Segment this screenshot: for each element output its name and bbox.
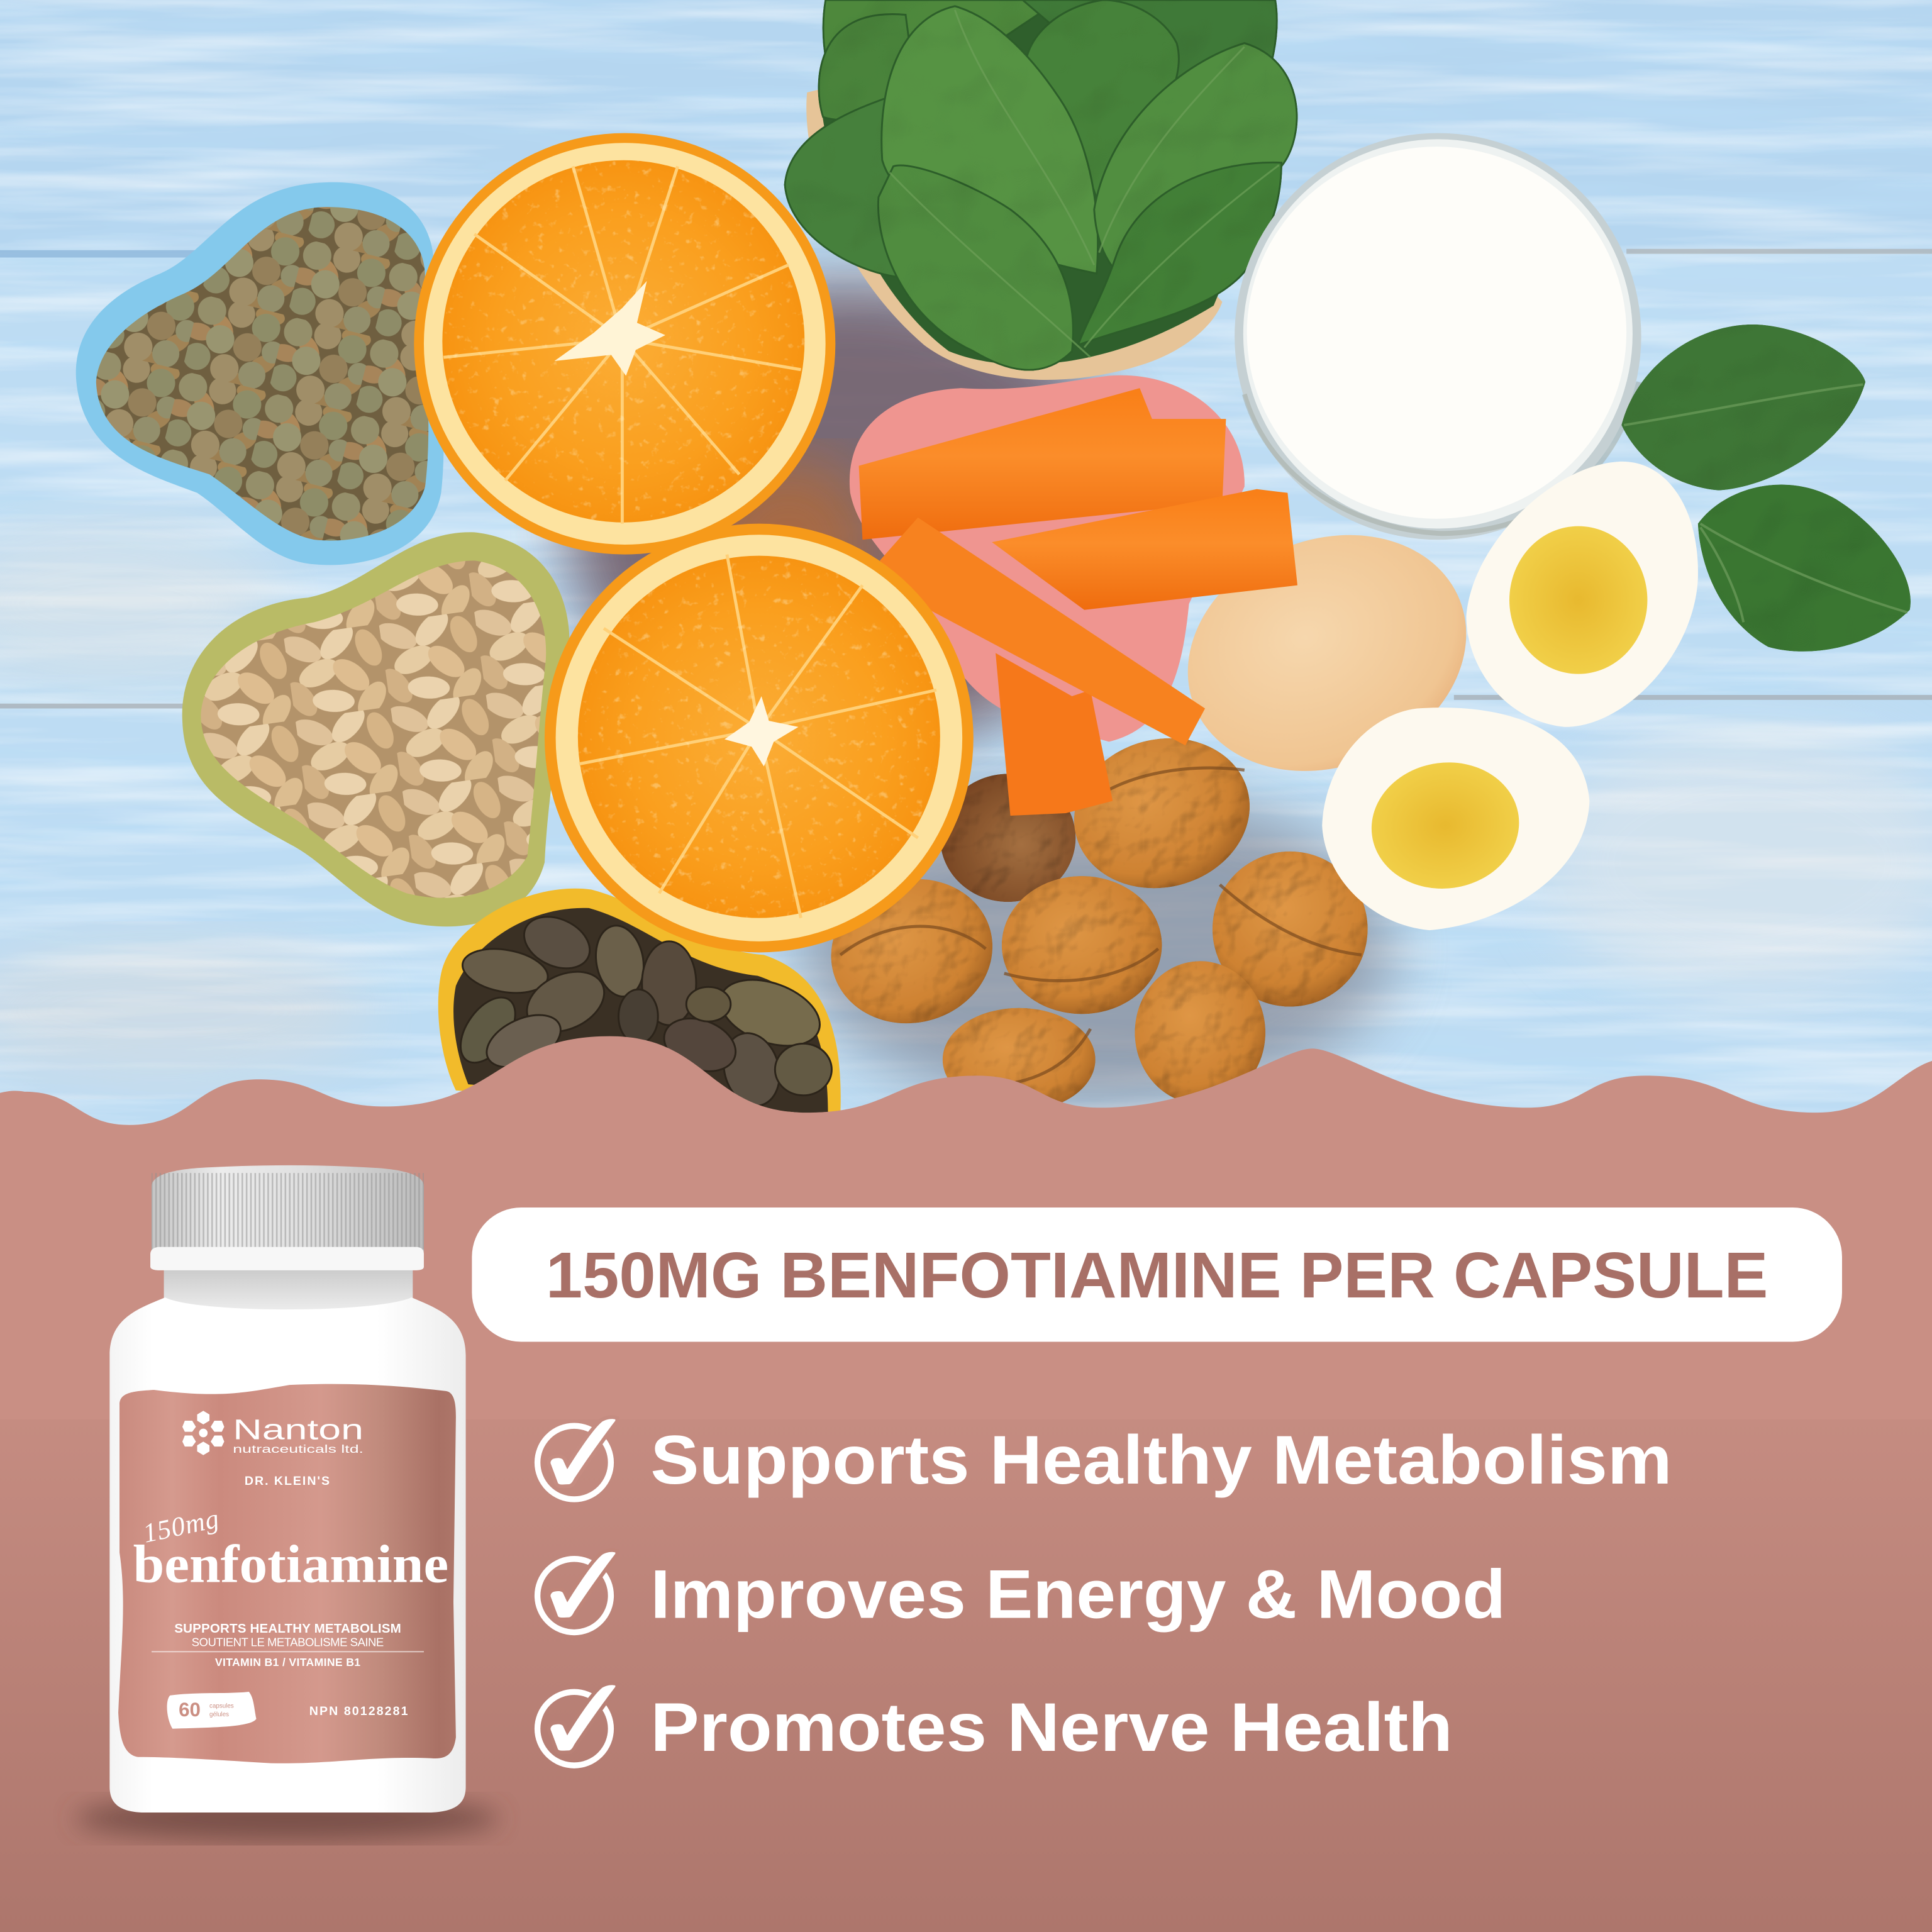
bottle neck <box>164 1267 413 1318</box>
food: carrots in pink bowl <box>850 375 1297 816</box>
label divider <box>152 1651 424 1652</box>
lower panel with wavy top edge <box>0 1036 1932 1932</box>
product bottle <box>109 1165 466 1813</box>
brand name: Nanton <box>233 1413 364 1445</box>
food: pumpkin seeds in yellow bowl <box>438 889 841 1115</box>
capsule count badge: capsules <box>209 1702 234 1709</box>
food: spinach bowl <box>785 0 1297 380</box>
food: sunflower seeds in green bowl <box>182 532 570 926</box>
english claim: SUPPORTS HEALTHY METABOLISM <box>174 1621 401 1636</box>
handwritten dose: 150mg <box>140 1504 221 1549</box>
check icon <box>538 1419 615 1499</box>
headline pill <box>472 1208 1842 1342</box>
product name: benfotiamine <box>133 1534 448 1594</box>
food: walnuts <box>814 719 1389 1111</box>
food: top orange half <box>414 133 835 555</box>
check icon <box>538 1552 615 1633</box>
check icon <box>538 1685 615 1765</box>
npn number: NPN 80128281 <box>309 1704 408 1718</box>
brand line: DR. KLEIN'S <box>245 1474 331 1488</box>
brand subtitle: nutraceuticals ltd. <box>233 1443 364 1455</box>
benefit: nerve health: Promotes Nerve Health <box>650 1689 1453 1766</box>
bottle cap <box>150 1165 424 1270</box>
food: lentils in blue bowl <box>76 182 443 565</box>
bottle body <box>109 1297 466 1813</box>
capsule count badge <box>167 1692 257 1729</box>
food: whole boiled egg in shell <box>1152 494 1502 812</box>
food: halved boiled eggs <box>1322 462 1698 930</box>
food: glass of milk <box>1235 133 1641 540</box>
bottle label panel <box>118 1384 456 1763</box>
benefit: metabolism: Supports Healthy Metabolism <box>650 1422 1672 1499</box>
bottle shadow <box>75 1796 499 1841</box>
capsule count badge: 60 <box>179 1699 201 1721</box>
food: loose spinach leaves <box>1621 325 1911 652</box>
vitamin line: VITAMIN B1 / VITAMINE B1 <box>215 1656 360 1668</box>
benefit: energy and mood: Improves Energy & Mood <box>650 1556 1506 1633</box>
capsule count badge: gélules <box>209 1711 229 1718</box>
photo background: blue painted wood planks <box>0 0 1932 1146</box>
brand logo flower <box>182 1411 225 1455</box>
headline pill: 150MG BENFOTIAMINE PER CAPSULE <box>546 1239 1768 1311</box>
french claim: SOUTIENT LE METABOLISME SAINE <box>192 1635 384 1648</box>
food: lower orange half <box>545 524 974 952</box>
